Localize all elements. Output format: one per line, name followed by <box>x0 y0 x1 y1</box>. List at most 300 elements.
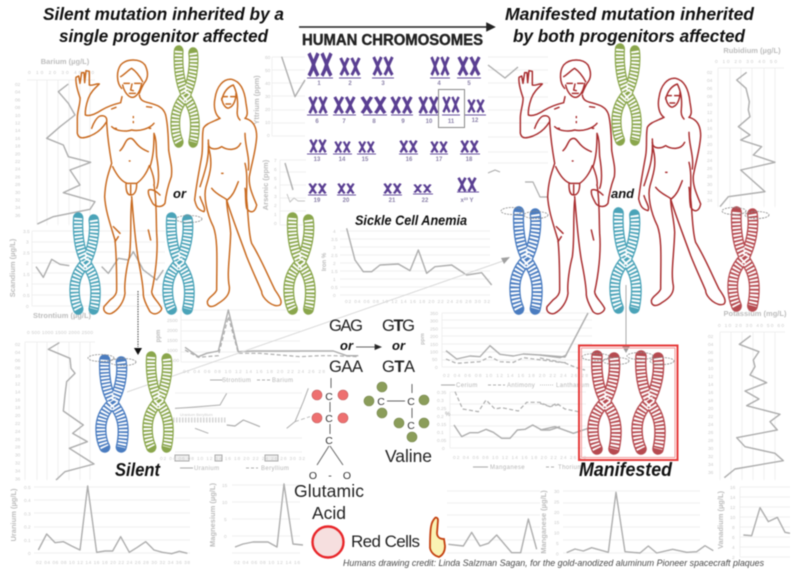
cerium values: 150 <box>430 342 438 348</box>
arsenic values: 6 <box>274 167 277 173</box>
chromosome numbers: 22 <box>422 198 429 204</box>
ppm label: ppm <box>156 330 162 342</box>
uranium values: 0.5 <box>24 485 31 491</box>
arsenic values: 2 <box>274 203 277 209</box>
chart: vanadium <box>716 485 790 561</box>
manganese-thorium values: 0.35 <box>437 390 447 396</box>
rubidium rows: 28 <box>707 174 713 180</box>
manganese values: 15 <box>554 520 560 526</box>
manganese values: 30 <box>554 489 560 495</box>
legend: strontium: Strontium <box>222 378 251 384</box>
chromosome: green, top right <box>616 49 637 140</box>
vanadium values: 8 <box>732 525 735 531</box>
arsenic values: 0 <box>274 221 277 227</box>
barium row labels: 36 <box>15 213 21 219</box>
uranium values: 0.2 <box>24 525 31 531</box>
green atoms <box>364 382 429 442</box>
iron label: Iron % <box>322 252 328 271</box>
chromosome: manifested, right <box>637 356 660 449</box>
potassium line <box>724 336 783 478</box>
carbon atoms <box>325 391 333 447</box>
strontium ticks: 0 500 1000 1500 2000 2500 <box>27 330 93 336</box>
chromosome numbers: 4 <box>437 81 441 87</box>
rubidium rows: 26 <box>707 166 713 172</box>
barium row labels: 20 <box>15 151 21 157</box>
strontium rows: 18 <box>15 405 21 411</box>
scandium values: 1 <box>26 282 29 288</box>
chart: manganese <box>539 489 713 557</box>
chart: manganese and thorium <box>437 390 588 471</box>
uranium ticks: 02 04 06 08 10 12 14 16 18 20 22 24 26 28 30 32 34 36 38 <box>36 560 190 566</box>
cerium line, end rise <box>540 313 588 357</box>
bonds <box>387 384 412 418</box>
scandium values: 3 <box>26 240 29 246</box>
potassium title: Potassium (mg/L) <box>724 309 787 318</box>
cerium values: 200 <box>430 334 438 340</box>
ppm values: 1000 <box>167 348 178 354</box>
chromosome: silent, blue <box>101 360 123 447</box>
chromosome numbers: 6 <box>315 119 319 125</box>
ppm values: 2000 <box>167 328 178 334</box>
yttrium values: 50 <box>265 68 271 74</box>
legend: barium: Barium <box>272 378 293 384</box>
rubidium rows: 24 <box>707 158 713 164</box>
yttrium values: 60 <box>265 55 271 61</box>
manganese values: 25 <box>554 499 560 505</box>
percent label: % <box>445 412 451 418</box>
chromosome numbers: 18 <box>466 157 473 163</box>
chromosome numbers: x²³ Y <box>461 197 473 204</box>
legend: lanthanum: Lanthanum <box>556 383 590 389</box>
chromosome: teal, right side <box>615 213 636 308</box>
scandium axis label: Scandium (µg/L) <box>8 238 17 297</box>
codon GTA: GTA <box>382 358 415 376</box>
chromosome numbers: 13 <box>314 157 321 163</box>
yttrium line, right part <box>488 65 518 78</box>
arsenic values: 5 <box>274 176 277 182</box>
rubidium rows: 18 <box>707 134 713 140</box>
manganese values: 5 <box>556 541 559 547</box>
chart: lower middle series <box>447 491 540 553</box>
rubidium rows: 06 <box>707 86 713 92</box>
vanadium values: 16 <box>730 485 736 491</box>
oxygen atoms: - <box>328 470 332 482</box>
cerium values: 250 <box>430 326 438 332</box>
potassium rows: 08 <box>708 358 714 364</box>
barium row labels: 34 <box>15 205 21 211</box>
magnesium label: Magnesium (µg/L) <box>208 483 217 547</box>
legend <box>441 383 590 389</box>
heading: manifested mutation: by both progenitors affected <box>513 26 745 46</box>
strontium rows: 14 <box>15 389 21 395</box>
cerium ticks: 02 04 06 08 10 12 14 16 18 20 22 24 26 28 <box>443 373 588 379</box>
chart: uranium <box>9 485 190 566</box>
legend: beryllium: Beryllium <box>261 466 289 472</box>
gene markers <box>582 352 674 364</box>
label: red cells: Red Cells <box>351 532 420 551</box>
manganese-thorium values: 0.1 <box>437 430 444 436</box>
bonds <box>317 378 343 465</box>
iron values: 0.5 <box>331 285 338 291</box>
iron values: 2.5 <box>331 253 338 259</box>
arrow: top <box>299 24 494 30</box>
arsenic values: 3 <box>274 194 277 200</box>
barium axis ticks: 0 10 20 30 40 50 <box>28 70 94 76</box>
vanadium values: 6 <box>732 535 735 541</box>
scandium values: 1.5 <box>23 272 30 278</box>
chromosome: red, right side <box>722 208 769 306</box>
arsenic line, far right part <box>525 182 548 197</box>
barium row labels: 12 <box>15 120 21 126</box>
rubidium rows: 34 <box>707 198 713 204</box>
silent genotype <box>88 354 169 480</box>
thorium line, end <box>540 403 578 412</box>
scandium values: 0 <box>26 304 29 310</box>
lower middle line <box>448 519 537 553</box>
molecule: glutamic acid <box>294 378 364 523</box>
chromosome numbers <box>314 81 479 204</box>
strontium rows: 24 <box>15 429 21 435</box>
yttrium values: 0 <box>267 133 270 139</box>
potassium rows: 32 <box>708 454 714 460</box>
legend: thorium: Thorium <box>558 465 583 471</box>
chromosome numbers: 11 <box>448 119 455 125</box>
potassium rows: 18 <box>708 398 714 404</box>
cerium line <box>446 346 567 359</box>
molecule: valine <box>364 382 432 466</box>
barium row labels: 22 <box>15 159 21 165</box>
cerium values: 300 <box>430 319 438 325</box>
rubidium rows: 14 <box>707 118 713 124</box>
strontium rows: 16 <box>15 397 21 403</box>
strontium rows: 26 <box>15 437 21 443</box>
strontium title: Strontium (µg/L) <box>33 311 92 320</box>
scandium line <box>36 259 69 277</box>
manganese values: 0 <box>556 551 559 557</box>
chromosome numbers: 1 <box>317 81 321 87</box>
chart: magnesium <box>208 483 303 566</box>
heading: silent mutation: Silent mutation inherited by a <box>43 4 284 24</box>
arsenic label: Arsenic (ppm) <box>261 159 270 210</box>
strontium rows: 28 <box>15 445 21 451</box>
label: valine: Valine <box>385 446 432 466</box>
ppm values: 3000 <box>167 308 178 314</box>
potassium rows: 24 <box>708 422 714 428</box>
barium row labels: 30 <box>15 190 21 196</box>
figure: female, silent side <box>195 79 281 307</box>
panel: codon change <box>329 317 415 376</box>
barium row labels: 02 <box>15 82 21 88</box>
label: acid: Acid <box>312 503 346 523</box>
potassium rows: 36 <box>708 470 714 476</box>
chromosome pairs <box>309 53 484 193</box>
barium row labels: 06 <box>15 97 21 103</box>
potassium rows: 28 <box>708 438 714 444</box>
manganese-thorium ticks: 02 04 06 08 10 12 14 16 18 20 22 24 26 28 <box>453 455 586 461</box>
vanadium label: Vanadium (µg/L) <box>716 490 725 549</box>
chart: cerium antimony lanthanum <box>420 311 592 389</box>
legend <box>473 465 583 471</box>
connector label: and: and <box>611 186 635 201</box>
codon GTG: GTG <box>382 317 415 335</box>
yttrium values: 30 <box>265 94 271 100</box>
icon: sickle cell <box>430 518 445 557</box>
iron values: 3 <box>333 245 336 251</box>
vanadium line <box>743 508 790 536</box>
chromosome numbers: 19 <box>314 198 321 204</box>
barium row labels: 10 <box>15 113 21 119</box>
potassium rows: 34 <box>708 462 714 468</box>
arrow: diagonal link from silent to manifested <box>127 257 510 392</box>
manganese-thorium values: 0 <box>442 446 445 452</box>
magnesium values: 10 <box>222 500 228 506</box>
antimony line <box>446 357 567 363</box>
potassium rows: 30 <box>708 446 714 452</box>
barium row labels: 26 <box>15 174 21 180</box>
legend: antimony: Antimony <box>507 383 535 389</box>
carbon atoms: C <box>325 413 333 425</box>
manganese percent line <box>454 425 560 438</box>
rubidium ticks: 0 10 20 30 40 50 <box>715 59 777 65</box>
vanadium values: 12 <box>730 505 736 511</box>
potassium rows: 20 <box>708 406 714 412</box>
strontium rows: 10 <box>15 374 21 380</box>
barium row labels: 14 <box>15 128 21 134</box>
chart: scandium <box>8 229 165 310</box>
carbon atoms: C <box>325 391 333 403</box>
chromosome numbers: 3 <box>381 81 385 87</box>
ppm values: 2500 <box>167 318 178 324</box>
yttrium values: 40 <box>265 81 271 87</box>
carbon atoms: C <box>325 435 333 447</box>
thorium line <box>455 392 560 412</box>
karyotype title: HUMAN CHROMOSOMES <box>302 32 483 49</box>
yttrium values: 20 <box>265 107 271 113</box>
fragment three <box>287 388 308 428</box>
label: glutamic acid: Glutamic <box>294 481 364 501</box>
chromosome numbers: 20 <box>343 198 350 204</box>
strontium rows: 20 <box>15 413 21 419</box>
scandium values: 3.5 <box>23 229 30 235</box>
karyotype panel: human chromosomes <box>299 24 494 204</box>
strontium rows: 06 <box>15 358 21 364</box>
chromosome: green, top left <box>175 51 195 142</box>
potassium rows: 06 <box>708 350 714 356</box>
gene markers <box>88 354 136 366</box>
legend <box>180 466 289 472</box>
potassium rows: 14 <box>708 382 714 388</box>
legend: manganese: Manganese <box>490 465 525 471</box>
strontium rows: 12 <box>15 382 21 388</box>
arsenic values: 1 <box>274 212 277 218</box>
manganese-thorium values: 0.15 <box>437 422 447 428</box>
magnesium values: 0 <box>224 534 227 540</box>
cerium values: 350 <box>430 311 438 317</box>
arrow: from parents to manifested <box>622 285 630 353</box>
barium row labels: 04 <box>15 90 21 96</box>
scandium values: 0.5 <box>23 293 30 299</box>
chromosome numbers: 14 <box>339 157 346 163</box>
chromosome: green, lower left <box>289 218 310 309</box>
connector label: or: or <box>173 186 187 201</box>
uranium values: 0.3 <box>24 511 31 517</box>
vanadium values: 14 <box>730 495 736 501</box>
codon GAG: GAG <box>329 317 363 335</box>
panel frame <box>579 346 678 460</box>
iron values: 0 <box>333 293 336 299</box>
uranium values: 0.1 <box>24 538 31 544</box>
manifested label: Manifested <box>579 460 672 481</box>
legend: cerium: Cerium <box>456 383 478 389</box>
chromosome: silent, green <box>148 357 169 447</box>
uranium values: 0.4 <box>24 498 31 504</box>
chromosome: teal, left <box>75 218 96 309</box>
rubidium line <box>720 72 775 207</box>
codon GAA: GAA <box>329 358 363 376</box>
chart: strontium <box>15 311 95 482</box>
potassium rows: 02 <box>708 334 714 340</box>
chart: strontium and barium ppm <box>156 308 358 384</box>
manganese line <box>567 492 713 553</box>
iron values: 1.5 <box>331 269 338 275</box>
cerium values: 0 <box>435 365 438 371</box>
cerium ppm label: ppm <box>420 333 426 345</box>
broken tick boxes <box>175 455 278 461</box>
strontium rows: 36 <box>15 476 21 482</box>
potassium rows: 26 <box>708 430 714 436</box>
rubidium rows: 04 <box>707 78 713 84</box>
barium ppm line <box>185 317 358 357</box>
barium line <box>37 84 95 224</box>
rubidium rows: 30 <box>707 182 713 188</box>
manganese-thorium values: 0.3 <box>437 398 444 404</box>
heading: manifested mutation: Manifested mutation inherited <box>505 4 754 24</box>
strontium rows: 04 <box>15 350 21 356</box>
chromosome numbers: 8 <box>372 119 376 125</box>
uranium legend inside: Uranium Beryllium <box>180 412 213 417</box>
iron values: 2 <box>333 261 336 267</box>
antimony line, end <box>540 358 585 370</box>
rubidium rows: 32 <box>707 190 713 196</box>
scandium values: 2 <box>26 261 29 267</box>
magnesium line <box>235 484 303 547</box>
heading: silent mutation: single progenitor affected <box>59 26 268 46</box>
potassium rows: 16 <box>708 390 714 396</box>
iron values: 4 <box>333 229 336 235</box>
heading: manifested mutation <box>505 4 754 46</box>
chromosome numbers: 21 <box>389 198 396 204</box>
oxygen atoms: O <box>343 470 351 482</box>
hatched strip <box>173 418 227 422</box>
chart: rubidium <box>707 46 784 207</box>
iron line <box>347 228 492 285</box>
cerium values: 50 <box>432 357 438 363</box>
chart: yttrium <box>252 55 548 163</box>
chart: uranium and beryllium <box>160 388 310 472</box>
strontium ppm line <box>185 310 358 357</box>
carbon atoms: C <box>407 396 415 408</box>
ppm ticks: 02 04 06 08 10 12 14 16 18 20 22 24 26 28 <box>183 369 325 375</box>
iron values: 3.5 <box>331 237 338 243</box>
fragment two <box>227 420 260 427</box>
chromosome numbers: 7 <box>342 119 346 125</box>
carbon atoms: C <box>377 396 385 408</box>
chromosome numbers: 17 <box>436 157 443 163</box>
fragment dashed <box>295 417 310 422</box>
ppm values: 1500 <box>167 338 178 344</box>
uranium line <box>38 486 187 554</box>
ppm values: 500 <box>171 358 179 364</box>
chromosome numbers: 2 <box>348 81 352 87</box>
strontium rows: 22 <box>15 421 21 427</box>
barium row labels: 16 <box>15 136 21 142</box>
chart title: barium: Barium (µg/L) <box>41 57 90 66</box>
arsenic line, right part <box>488 170 500 173</box>
figure: female, manifested side <box>639 78 725 306</box>
vanadium values: 10 <box>730 515 736 521</box>
figure: male, manifested side <box>519 60 615 314</box>
scandium line, right part <box>102 252 163 280</box>
carbon atoms: C <box>407 420 415 432</box>
rubidium rows: 20 <box>707 142 713 148</box>
iron values: 1 <box>333 277 336 283</box>
barium row labels: 08 <box>15 105 21 111</box>
manganese values: 20 <box>554 510 560 516</box>
vanadium values: 4 <box>732 545 735 551</box>
potassium ticks: 0 10 20 30 40 50 60 <box>718 323 784 329</box>
scandium values: 2.5 <box>23 250 30 256</box>
potassium rows: 10 <box>708 366 714 372</box>
rubidium rows: 22 <box>707 150 713 156</box>
chromosome baselines <box>307 78 486 195</box>
uranium label: Uranium (µg/L) <box>9 488 18 542</box>
manganese label: Manganese (µg/L) <box>539 490 548 554</box>
potassium rows: 12 <box>708 374 714 380</box>
arsenic second line <box>287 194 305 202</box>
strontium rows: 34 <box>15 468 21 474</box>
or, right: or <box>392 338 406 353</box>
iron ticks: 02 04 06 08 10 12 14 16 18 20 22 24 26 28 30 32 <box>345 299 490 305</box>
uranium values: 0 <box>28 551 31 557</box>
potassium rows: 04 <box>708 342 714 348</box>
manganese percent line, end <box>540 427 588 433</box>
chromosome numbers: 16 <box>406 157 413 163</box>
yttrium label: Yttrium (ppm) <box>252 75 261 125</box>
heading: silent mutation <box>43 4 284 46</box>
icon: red cell <box>312 526 344 558</box>
arrow: dotted from parents to silent <box>134 291 142 355</box>
chart: barium <box>15 57 95 225</box>
figure: male, silent side <box>76 60 172 314</box>
or, left: or <box>340 338 354 353</box>
yttrium line <box>282 57 305 97</box>
fragment one <box>195 428 208 433</box>
strontium rows: 02 <box>15 342 21 348</box>
barium row labels: 24 <box>15 167 21 173</box>
credit: Humans drawing credit: Linda Salzman Sagan, for the gold-anodized aluminum Pioneer spacecraft plaques <box>343 558 764 569</box>
rubidium rows: 02 <box>707 70 713 76</box>
barium row labels: 28 <box>15 182 21 188</box>
manganese-thorium values: 0.05 <box>437 438 447 444</box>
chromosome numbers: 5 <box>467 81 471 87</box>
potassium rows: 22 <box>708 414 714 420</box>
chromosome: manifested, left <box>593 356 616 449</box>
vanadium values: 2 <box>732 555 735 561</box>
manganese values: 10 <box>554 531 560 537</box>
chromosome numbers: 12 <box>472 118 479 124</box>
legend: uranium: Uranium <box>194 466 219 472</box>
chromosome: blue, right side <box>501 208 548 309</box>
